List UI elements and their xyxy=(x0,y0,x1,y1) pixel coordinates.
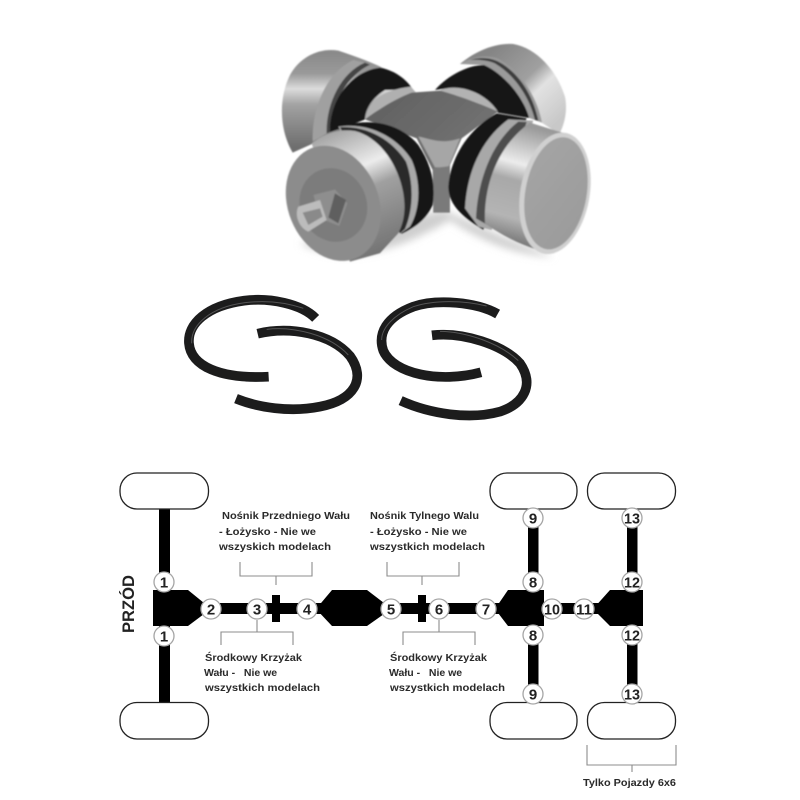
label: 6x6 vehicles only: Tylko Pojazdy 6x6 xyxy=(583,777,676,789)
clip 4 xyxy=(401,331,527,415)
rear axle xyxy=(490,473,577,739)
front left bearing cup xyxy=(269,122,434,275)
bracket: rear carrier xyxy=(387,562,459,585)
number 10: 10 xyxy=(544,602,560,618)
number 1 bottom: 1 xyxy=(160,628,168,646)
third axle xyxy=(588,473,676,739)
label: rear centre cross: Wału - Nie we xyxy=(389,667,462,679)
number 1 top xyxy=(154,572,174,592)
number 12 top: 12 xyxy=(624,574,640,592)
label: rear carrier bearing: wszystkich modelach xyxy=(369,541,485,553)
label: rear carrier bearing: Nośnik Tylnego Walu xyxy=(370,510,479,522)
soft shadow xyxy=(300,210,553,257)
bracket: rear centre cross xyxy=(403,620,475,645)
number 9 bottom xyxy=(523,684,543,704)
label: front carrier bearing: wszyskich modelach xyxy=(218,541,331,553)
number 8 bottom: 8 xyxy=(529,628,537,644)
number 9 top xyxy=(523,508,543,528)
bracket: 6x6 only xyxy=(587,745,676,772)
label: front carrier bearing xyxy=(218,510,350,553)
centre cross joint rear xyxy=(418,595,426,622)
number 7 xyxy=(476,599,496,619)
number 8 bottom xyxy=(523,625,543,645)
front differential xyxy=(153,590,204,626)
number 2 xyxy=(201,599,221,619)
number 4: 4 xyxy=(303,602,312,618)
front right bearing cup xyxy=(448,113,600,260)
number 8 top xyxy=(523,572,543,592)
drivetrain diagram xyxy=(119,473,676,789)
number 9 bottom: 9 xyxy=(529,686,537,704)
label: rear centre cross: Środkowy Krzyżak xyxy=(390,651,487,664)
label: rear centre cross: wszystkich modelach xyxy=(389,682,505,694)
bracket: front centre cross xyxy=(221,620,293,645)
label: front carrier bearing: - Łożysko - Nie we xyxy=(219,526,316,538)
photo: universal joint cross xyxy=(269,44,600,275)
number 1 top: 1 xyxy=(160,574,168,592)
front direction label: PRZÓD xyxy=(119,575,138,633)
centre transfer case xyxy=(316,590,384,626)
number 3 xyxy=(247,599,267,619)
clip 3 xyxy=(382,302,498,377)
back right bearing cup xyxy=(435,44,566,134)
label: rear carrier bearing: - Łożysko - Nie we xyxy=(370,526,467,538)
label: front centre cross xyxy=(204,651,320,694)
number 8 top: 8 xyxy=(529,574,537,592)
third differential xyxy=(593,590,643,626)
label: front centre cross: Wału - Nie we xyxy=(204,667,277,679)
clip 1 xyxy=(189,300,316,377)
number 11 xyxy=(574,599,594,619)
rear differential xyxy=(495,590,544,626)
bracket: front carrier xyxy=(240,562,312,585)
label: rear centre cross xyxy=(389,651,505,694)
number 6: 6 xyxy=(435,602,443,618)
number 6 xyxy=(429,599,449,619)
number 9 top: 9 xyxy=(529,510,537,528)
label: front carrier bearing: Nośnik Przedniego Wału xyxy=(222,510,350,522)
number 2: 2 xyxy=(207,602,215,618)
label: front centre cross: wszystkich modelach xyxy=(204,682,320,694)
number 4 xyxy=(297,599,317,619)
clip 2 xyxy=(236,329,357,409)
grease nipple xyxy=(297,189,347,232)
label: front centre cross: Środkowy Krzyżak xyxy=(205,651,302,664)
centre cross body xyxy=(365,91,498,213)
number 11: 11 xyxy=(576,602,592,618)
front axle xyxy=(120,473,208,739)
number 13 top: 13 xyxy=(624,510,640,528)
number 5 xyxy=(381,599,401,619)
photo: retaining clips xyxy=(189,300,527,415)
centre cross joint front xyxy=(272,595,280,622)
number 12 bottom: 12 xyxy=(624,628,640,644)
number 5: 5 xyxy=(387,602,395,618)
weld seam xyxy=(418,137,460,167)
label: rear carrier bearing xyxy=(369,510,485,553)
number 3: 3 xyxy=(253,602,261,618)
number 1 bottom xyxy=(154,626,174,646)
number 13 bottom: 13 xyxy=(624,686,640,704)
propeller shaft xyxy=(190,603,600,614)
number 7: 7 xyxy=(482,602,490,618)
back left bearing cup xyxy=(282,50,418,153)
